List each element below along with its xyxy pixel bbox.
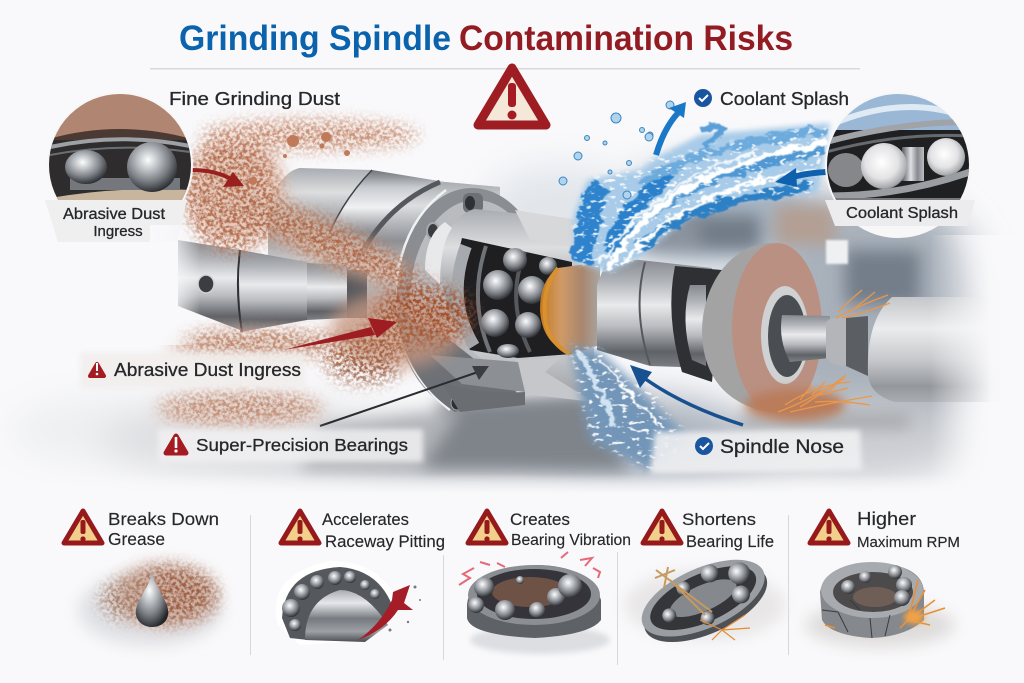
grinding wheel (702, 243, 822, 413)
heading: Accelerates (322, 510, 409, 529)
heading: Bearing Vibration (511, 532, 631, 549)
panel: higher maximum rpm (805, 509, 960, 647)
heading: Higher (857, 509, 916, 529)
label: super-precision bearings: Super-Precision Bearings (196, 435, 408, 455)
label: coolant splash with check: Coolant Splash (720, 89, 849, 109)
inset label: abrasive dust ingress: Ingress (93, 223, 143, 240)
flange with bolt holes (395, 188, 549, 412)
heading: Shortens (682, 510, 756, 529)
machine window highlight (826, 240, 848, 264)
inset label: abrasive dust ingress: Abrasive Dust (63, 206, 166, 223)
illustration: tilted worn bearing (625, 544, 785, 658)
panel: creates bearing vibration (459, 510, 631, 654)
warning icon (643, 511, 681, 543)
illustration: grease drop in dust (78, 565, 222, 646)
heading: Raceway Pitting (325, 532, 445, 551)
icon: blue arrow at spindle nose (630, 365, 743, 425)
icon: blue arrow to inset (775, 168, 827, 187)
lower coolant spray (570, 345, 690, 470)
heading (682, 510, 774, 551)
warning icon (64, 511, 102, 543)
panel: breaks down grease (64, 509, 222, 646)
heading: Maximum RPM (857, 535, 960, 551)
label: spindle nose (650, 430, 862, 474)
inset label: coolant splash (825, 200, 975, 226)
upper collar segments (268, 168, 500, 305)
warning icon (810, 511, 848, 543)
label: spindle nose: Spindle Nose (720, 437, 844, 458)
spindle assembly (178, 168, 1000, 421)
inner shaft contaminated orange (540, 262, 600, 354)
warning icon (468, 511, 506, 543)
icon: black arrow to bearings (320, 366, 489, 426)
panel: shortens bearing life (625, 510, 785, 658)
warning icon (281, 511, 319, 543)
title (179, 19, 793, 58)
droplets (559, 101, 674, 199)
heading (510, 510, 631, 549)
rear shaft segments (178, 240, 396, 332)
heading (108, 509, 219, 549)
inset label: coolant splash: Coolant Splash (846, 205, 958, 222)
illustration: pitted raceway (276, 561, 421, 645)
heading: Grease (108, 529, 165, 549)
heading: Bearing Life (686, 532, 774, 551)
left edge fade (150, 225, 200, 345)
heading: Creates (510, 510, 570, 529)
bearing cutaway (455, 238, 572, 358)
panel: accelerates raceway pitting (276, 510, 445, 645)
right edge fade (930, 235, 1024, 500)
bottom fade (0, 474, 1024, 494)
output shaft (781, 297, 1000, 402)
background machinery (300, 205, 920, 470)
background fog and workshop (10, 165, 990, 487)
coolant splash (573, 123, 830, 272)
label: super-precision bearings (158, 429, 423, 462)
label: abrasive dust ingress: Abrasive Dust Ingress (114, 360, 301, 380)
inset label: abrasive dust ingress (45, 200, 187, 242)
title: Contamination Risks (459, 19, 793, 58)
spark glow (745, 389, 845, 421)
heading (322, 510, 445, 551)
label: abrasive dust ingress (80, 352, 305, 388)
bottom strip backdrop (0, 493, 1024, 683)
icon: main warning triangle (478, 68, 546, 125)
heading (857, 509, 960, 551)
dust cloud (155, 121, 475, 428)
front sleeve (597, 259, 722, 382)
inset: coolant splash (825, 92, 975, 238)
icon: blue arrow up (656, 102, 686, 155)
title: Grinding Spindle (179, 19, 451, 58)
dividers (250, 515, 789, 665)
icon: red arrow dust into inset (192, 170, 244, 187)
inset: abrasive dust (49, 94, 193, 200)
bearing housing (425, 209, 594, 412)
heading: Breaks Down (108, 509, 219, 529)
illustration: cracked bearing with sparks (805, 562, 955, 647)
label: fine grinding dust: Fine Grinding Dust (169, 89, 340, 109)
icon: big red arrow (283, 318, 397, 350)
illustration: vibrating bearing (459, 552, 610, 654)
sparks at wheel (778, 290, 890, 412)
